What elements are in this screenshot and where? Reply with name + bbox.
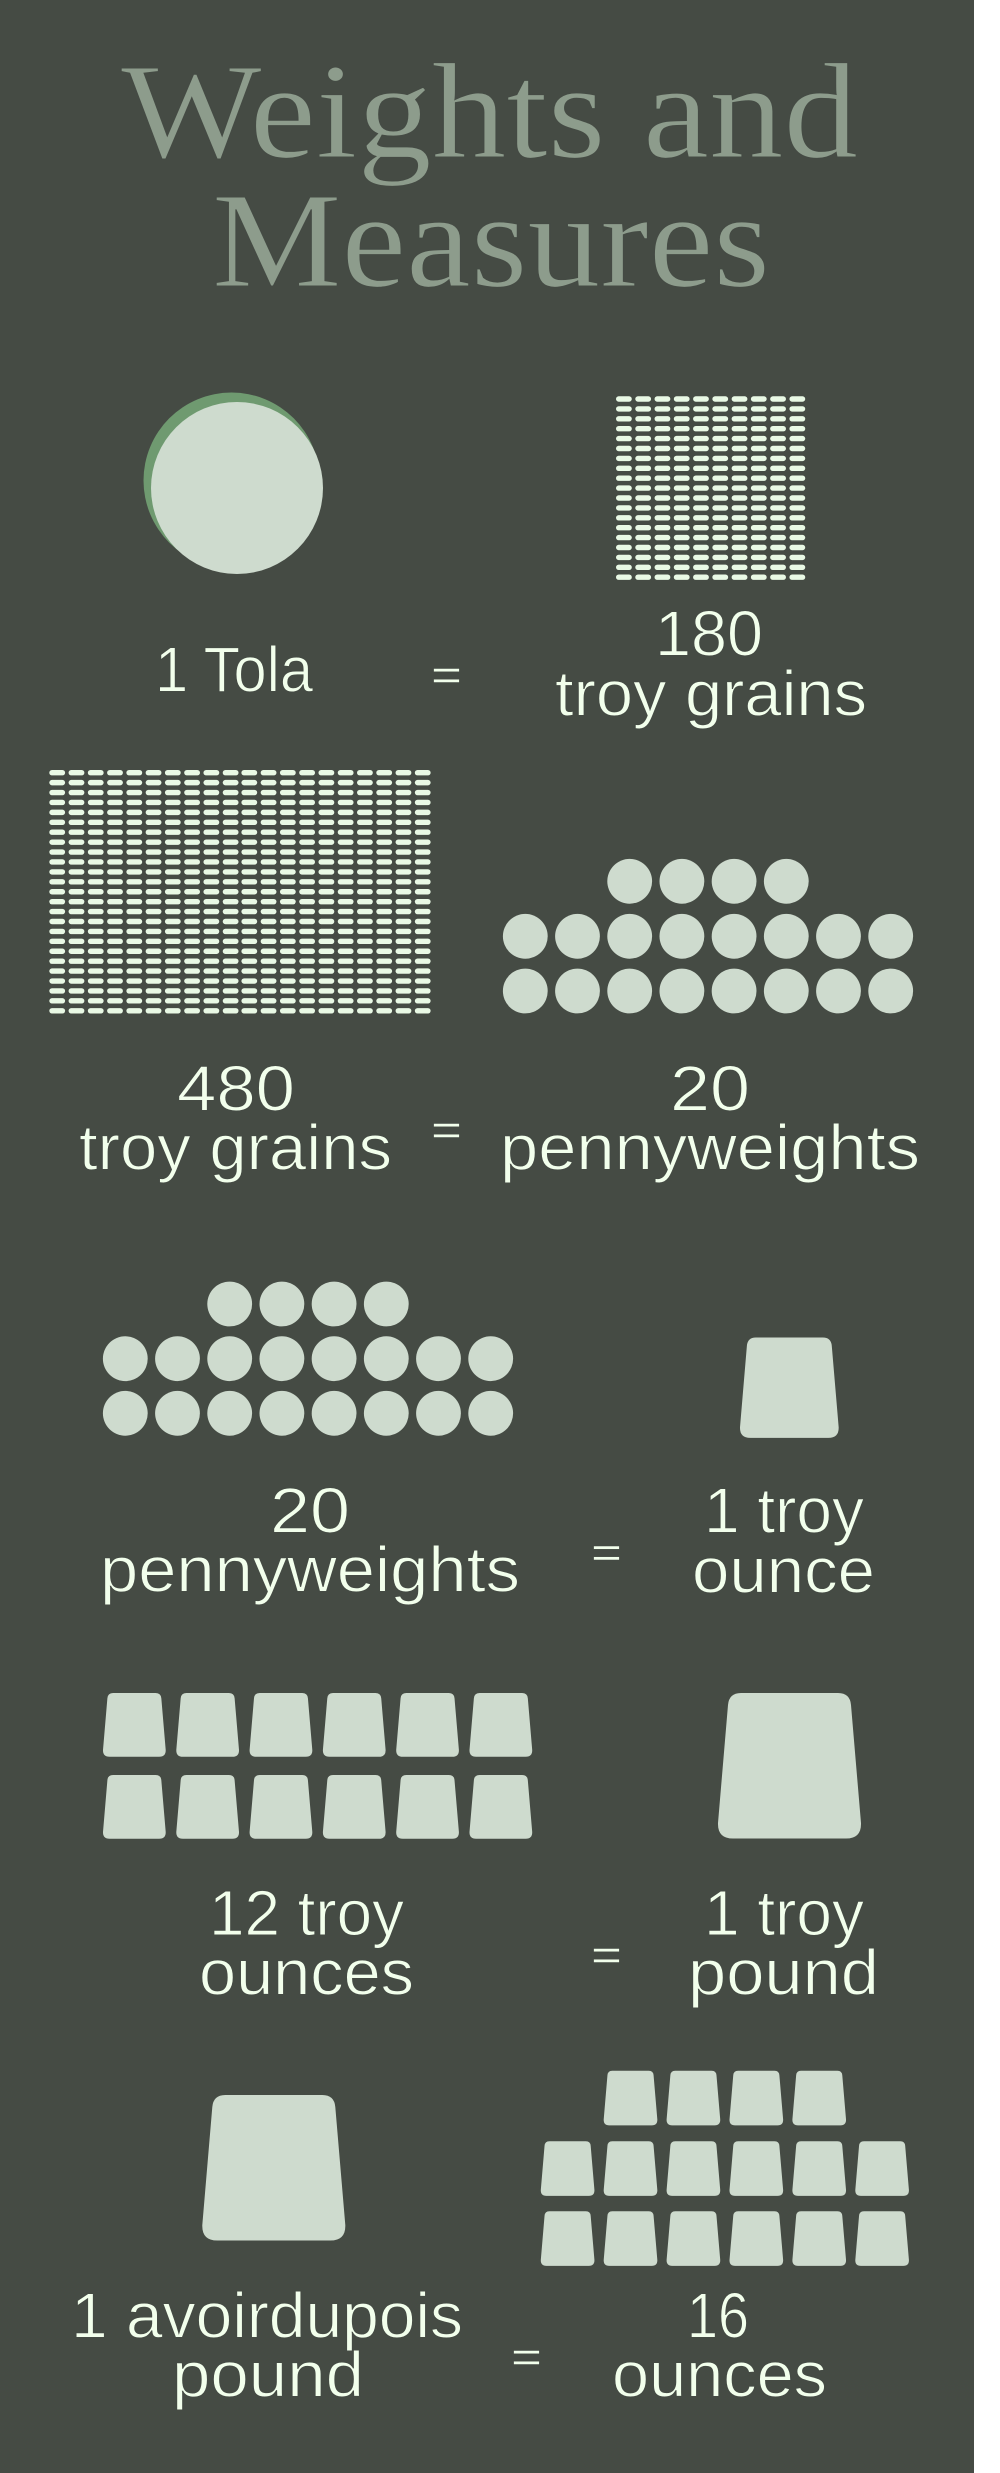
label: 20 pennyweights, row 3 — [100, 1475, 520, 1606]
icon: 20 pennyweights circles, row 3 — [103, 1282, 513, 1436]
label: 1 troy pound: pound — [688, 1936, 879, 2008]
label: 1 troy pound: 1 troy — [704, 1877, 864, 1949]
icon: 12 troy ounce weights — [103, 1693, 532, 1839]
label: 1 avoirdupois pound — [71, 2280, 463, 2410]
label: 180 troy grains: troy grains — [555, 657, 867, 729]
equals sign: row 1: = — [431, 651, 462, 700]
icon: 480 troy grains grid — [49, 770, 431, 1013]
label: 1 troy ounce: ounce — [692, 1534, 875, 1606]
label: 16 ounces — [612, 2280, 827, 2410]
label: 20 pennyweights — [500, 1053, 920, 1183]
label: 1 avoirdupois pound: 1 avoirdupois — [71, 2280, 463, 2352]
equals sign: row 4: = — [591, 1931, 622, 1980]
icon: tola coin — [144, 392, 323, 574]
equals sign: row 5: = — [511, 2333, 542, 2382]
label: 1 troy ounce: 1 troy — [704, 1475, 864, 1547]
icon: 16 ounce weights — [541, 2071, 909, 2266]
label: 16 ounces: ounces — [612, 2338, 827, 2410]
label: 180 troy grains — [555, 598, 867, 729]
label: 1 troy pound — [688, 1877, 879, 2008]
title — [121, 37, 858, 316]
label: 20 pennyweights: pennyweights — [500, 1111, 920, 1183]
label: 12 troy ounces: ounces — [199, 1936, 414, 2008]
icon: 20 pennyweights circles — [503, 859, 913, 1013]
title: Weights and — [121, 37, 858, 187]
label: 20 pennyweights: 20 — [670, 1053, 750, 1125]
equals sign: row 2: = — [431, 1106, 462, 1155]
label: 480 troy grains — [79, 1053, 392, 1184]
icon: 180 troy grains grid — [616, 396, 805, 580]
label: 1 Tola: 1 Tola — [155, 634, 313, 706]
icon: 1 avoirdupois pound weight — [202, 2095, 345, 2240]
equals sign: row 3: = — [591, 1529, 622, 1578]
label: 1 troy ounce — [692, 1475, 875, 1606]
label: 480 troy grains: 480 — [177, 1053, 295, 1125]
label: 20 pennyweights, row 3: 20 — [270, 1475, 350, 1547]
label: 180 troy grains: 180 — [655, 598, 763, 670]
icon: 1 troy ounce weight — [740, 1338, 839, 1438]
label: 12 troy ounces — [199, 1877, 414, 2008]
label: 20 pennyweights, row 3: pennyweights — [100, 1534, 520, 1606]
label: 480 troy grains: troy grains — [79, 1112, 392, 1184]
title: Measures — [212, 166, 770, 316]
label: 1 avoirdupois pound: pound — [172, 2338, 364, 2410]
label: 12 troy ounces: 12 troy — [209, 1877, 404, 1949]
icon: 1 troy pound weight — [718, 1693, 861, 1838]
label: 16 ounces: 16 — [687, 2280, 749, 2352]
